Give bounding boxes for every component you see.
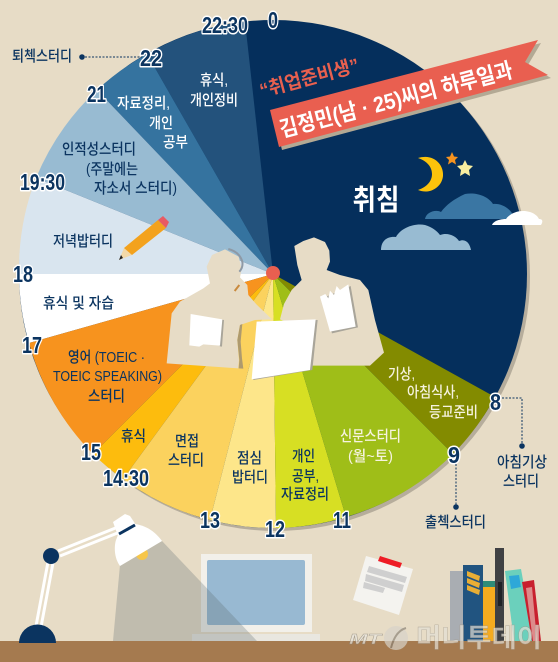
title quote: “취업준비생” — [257, 54, 362, 102]
label: newspaper study — [340, 428, 401, 465]
label: wake up and breakfast: 등교준비 — [429, 404, 478, 421]
desk lamp — [19, 514, 257, 643]
time labels: 9 — [448, 442, 460, 468]
callout: attendance study: 출첵스터디 — [425, 514, 486, 531]
callout: morning wake-up study — [497, 398, 547, 490]
label: aptitude study: (주말에는 — [86, 161, 138, 178]
label: aptitude study: 자소서 스터디) — [94, 180, 177, 197]
left person shadow — [237, 324, 243, 369]
label: personal study and organizing: 개인 — [292, 448, 315, 465]
time labels: 18 — [13, 261, 33, 287]
watermark — [349, 623, 542, 653]
label: aptitude study: 인적성스터디 — [62, 141, 136, 158]
label: rest and personal prep: 개인정비 — [190, 92, 238, 109]
desk — [0, 641, 558, 662]
label: English study — [53, 349, 162, 405]
time labels — [13, 7, 501, 542]
time labels: 8 — [490, 389, 501, 415]
label: lunch study: 밥터디 — [232, 469, 268, 486]
callout: checkout study — [12, 48, 142, 65]
icon: clouds — [381, 193, 542, 250]
label: organizing and study: 자료정리, — [117, 95, 170, 112]
label: interview study — [168, 433, 204, 469]
label: rest: 휴식 — [121, 428, 146, 445]
heading: sleep: 취침 — [352, 184, 400, 217]
title ribbon: 김정민(남 · 25)씨의 하루일과 — [277, 57, 515, 142]
time labels: 19:30 — [20, 169, 65, 195]
label: personal study and organizing: 자료정리 — [281, 486, 329, 503]
time labels: 14:30 — [103, 465, 149, 491]
left person — [167, 249, 272, 368]
time labels: 17 — [22, 332, 42, 358]
watermark: MT — [349, 631, 384, 648]
label: wake up and breakfast: 기상, — [388, 366, 415, 383]
time labels: 22 — [140, 45, 162, 71]
label: rest and personal prep — [190, 72, 238, 109]
right paper — [322, 286, 358, 333]
label: organizing and study: 개인 — [149, 115, 173, 132]
time labels: 21 — [87, 81, 106, 107]
watermark: 머니투데이 — [416, 623, 542, 653]
time labels: 12 — [265, 516, 285, 542]
label: English study: TOEIC SPEAKING) — [53, 368, 162, 385]
left paper — [191, 314, 224, 347]
time labels: 22:30 — [202, 12, 248, 38]
label: lunch study: 점심 — [237, 450, 262, 467]
callout: morning wake-up study: 아침기상 — [497, 454, 547, 471]
callout: checkout study: 퇴첵스터디 — [12, 48, 72, 65]
pie shadow — [22, 23, 530, 531]
label: English study: 스터디 — [88, 388, 125, 405]
center dot — [266, 266, 280, 280]
label: aptitude study — [62, 141, 177, 197]
label: newspaper study: (월~토) — [348, 448, 393, 465]
label: interview study: 면접 — [175, 433, 199, 450]
time labels: 0 — [268, 7, 278, 33]
label: dinner study: 저녁밥터디 — [53, 233, 113, 250]
icon: pencil — [119, 216, 169, 260]
pencil tick — [235, 285, 239, 291]
time labels: 13 — [200, 507, 220, 533]
label: lunch study — [232, 450, 268, 486]
label: wake up and breakfast — [388, 366, 478, 421]
head outline — [228, 249, 243, 272]
callout: attendance study — [425, 464, 486, 531]
label: rest and personal prep: 휴식, — [200, 72, 228, 89]
time labels: 15 — [81, 439, 101, 465]
label: wake up and breakfast: 아침식사, — [407, 384, 459, 401]
label: newspaper study: 신문스터디 — [340, 428, 401, 445]
label: interview study: 스터디 — [168, 452, 204, 469]
pie chart: daily schedule — [19, 20, 527, 528]
label: personal study and organizing — [281, 448, 329, 503]
label: personal study and organizing: 공부, — [292, 468, 319, 485]
memo note — [353, 556, 413, 615]
callout: morning wake-up study: 스터디 — [503, 473, 539, 490]
center paper — [253, 320, 318, 380]
label: organizing and study: 공부 — [163, 134, 188, 151]
time labels: 11 — [333, 507, 351, 533]
icon: stars — [446, 152, 473, 176]
books — [450, 548, 541, 641]
monitor — [192, 554, 320, 641]
label: organizing and study — [117, 95, 188, 151]
label: rest and self study: 휴식 및 자습 — [43, 295, 114, 312]
right person — [280, 237, 384, 366]
label: English study: 영어 (TOEIC · — [68, 349, 145, 366]
people silhouettes with papers — [167, 237, 384, 380]
icon: moon — [418, 157, 443, 192]
